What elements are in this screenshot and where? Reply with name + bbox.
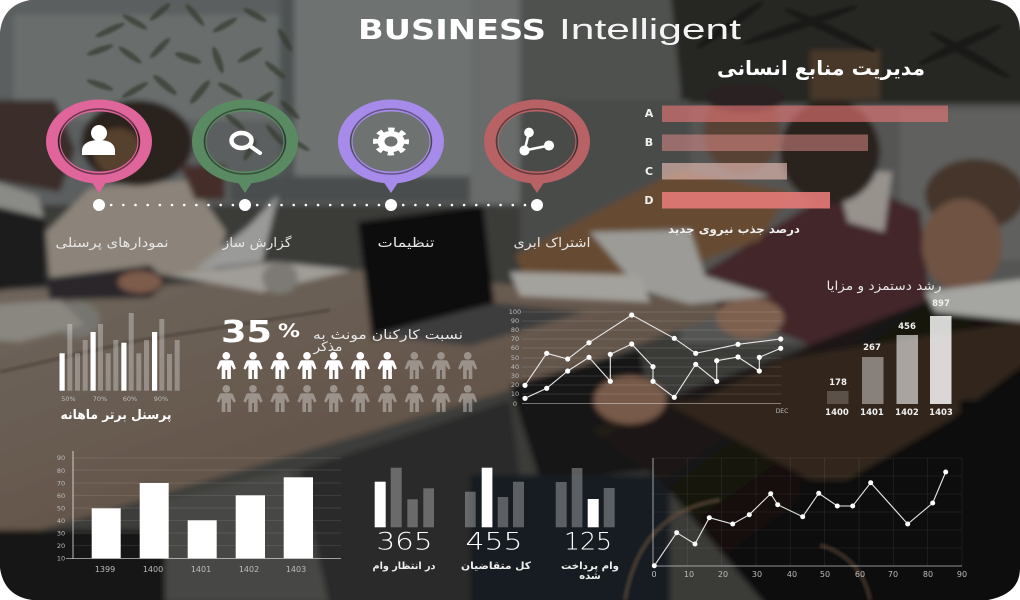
line chart: two series <box>509 308 788 415</box>
mini bars: top monthly personnel: 60% <box>123 395 137 403</box>
line chart: two series: 70 <box>511 335 519 343</box>
horizontal bar chart: new hires: D <box>644 194 654 207</box>
bar chart: yearly <box>57 451 341 574</box>
line chart: two series: 10 <box>511 390 519 398</box>
pin: cloud sharing <box>490 106 584 193</box>
line chart: large: 50 <box>820 570 830 579</box>
bar chart: wage growth: 456 <box>898 322 916 332</box>
stat block: waiting for loan <box>372 468 436 572</box>
line chart: large <box>651 458 967 579</box>
stat block: total applicants <box>461 468 531 572</box>
stat block: total applicants: کل متقاضیان <box>461 561 531 572</box>
timeline labels: اشتراک ابری <box>514 236 590 251</box>
line chart: two series: DEC <box>776 408 788 415</box>
line chart: large: 30 <box>752 570 762 579</box>
caption: new hires percentage: درصد جذب نیروی جدید <box>668 222 800 237</box>
horizontal bar chart: new hires: A <box>645 107 654 120</box>
line chart: large: 90 <box>957 570 967 579</box>
bar chart: wage growth: 1403 <box>929 408 953 418</box>
caption: female to male staff ratio: نسبت کارکنان مونث به <box>313 328 463 343</box>
bar chart: wage growth: 178 <box>829 378 847 388</box>
caption: top monthly personnel: پرسنل برتر ماهانه <box>60 408 172 423</box>
line chart: large: 80 <box>923 570 933 579</box>
line chart: two series: 60 <box>511 344 519 352</box>
line chart: two series: 0 <box>513 400 517 408</box>
caption: female to male staff ratio: مذکر <box>312 340 342 355</box>
line chart: two series: 80 <box>511 326 519 334</box>
stat block: total applicants: 455 <box>466 528 522 556</box>
title <box>358 13 741 46</box>
mini bars: top monthly personnel: 50% <box>61 395 76 403</box>
stat: 35 percent: % <box>278 320 300 342</box>
icon: user <box>82 125 115 155</box>
timeline labels: نمودارهای پرسنلی <box>56 236 168 251</box>
line chart: large: 70 <box>888 570 898 579</box>
stat block: waiting for loan: در انتظار وام <box>372 561 436 572</box>
bar chart: wage growth: 897 <box>932 299 950 309</box>
pin: report builder <box>198 106 292 193</box>
icon: magnifier <box>232 133 260 153</box>
timeline labels: گزارش ساز <box>221 235 292 251</box>
timeline labels: تنظیمات <box>378 236 435 251</box>
pin: settings <box>344 106 438 193</box>
bar chart: yearly: 1399 <box>95 565 115 574</box>
pictogram: people <box>217 352 477 412</box>
stat block: waiting for loan: 365 <box>376 528 432 556</box>
bar chart: yearly: 1401 <box>191 565 211 574</box>
stat: 35 percent: 35 <box>221 315 272 350</box>
bar chart: wage growth: 267 <box>863 343 881 353</box>
icon: gear <box>376 129 406 154</box>
bar chart: yearly: 1403 <box>286 565 306 574</box>
caption: female to male staff ratio <box>312 328 463 355</box>
horizontal bar chart: new hires <box>644 106 948 208</box>
horizontal bar chart: new hires: B <box>645 136 653 149</box>
line chart: large: 20 <box>718 570 728 579</box>
line chart: two series: 100 <box>509 308 521 316</box>
bar chart: yearly: 10 <box>57 554 65 562</box>
bar chart: yearly: 80 <box>57 467 65 475</box>
line chart: two series: 20 <box>511 381 519 389</box>
caption: wage growth: رشد دستمزد و مزایا <box>826 278 942 294</box>
heading: human resources management: مدیریت منابع انسانی <box>717 56 925 80</box>
timeline labels <box>56 235 590 251</box>
bar chart: wage growth: 1402 <box>895 408 919 418</box>
bar chart: wage growth <box>825 299 953 418</box>
line chart: large: 60 <box>855 570 865 579</box>
bar chart: yearly: 60 <box>57 492 65 500</box>
line chart: large: 0 <box>651 570 657 579</box>
stat block: loans paid <box>556 468 619 582</box>
pin: personnel charts <box>52 106 146 193</box>
bar chart: yearly: 1402 <box>239 565 259 574</box>
bar chart: yearly: 1400 <box>143 565 163 574</box>
line chart: two series: 50 <box>511 354 519 362</box>
stat: 35 percent <box>221 315 300 350</box>
title: BUSINESS <box>358 13 546 46</box>
bar chart: yearly: 70 <box>57 480 65 488</box>
line chart: large: 40 <box>787 570 797 579</box>
horizontal bar chart: new hires: C <box>645 165 653 178</box>
title: Intelligent <box>559 14 741 46</box>
stat block: loans paid: 125 <box>564 528 612 556</box>
icon: share nodes <box>521 129 553 154</box>
stat block: loans paid: شده <box>579 571 601 582</box>
mini bars: top monthly personnel: 70% <box>93 395 107 403</box>
mini bars: top monthly personnel: 90% <box>154 395 168 403</box>
line chart: two series: 30 <box>511 372 519 380</box>
bar chart: yearly: 90 <box>57 454 65 462</box>
stat block: loans paid: وام پرداخت <box>561 561 619 572</box>
bar chart: wage growth: 1401 <box>860 408 884 418</box>
bar chart: wage growth: 1400 <box>825 408 849 418</box>
line chart: large: 10 <box>684 570 694 579</box>
bar chart: yearly: 40 <box>57 517 65 525</box>
timeline of dots <box>93 199 543 211</box>
bar chart: yearly: 20 <box>57 542 65 550</box>
bar chart: yearly: 50 <box>57 504 65 512</box>
bar chart: yearly: 30 <box>57 530 65 538</box>
line chart: two series: 90 <box>511 317 519 325</box>
mini bars: top monthly personnel <box>60 313 180 423</box>
line chart: two series: 40 <box>511 363 519 371</box>
